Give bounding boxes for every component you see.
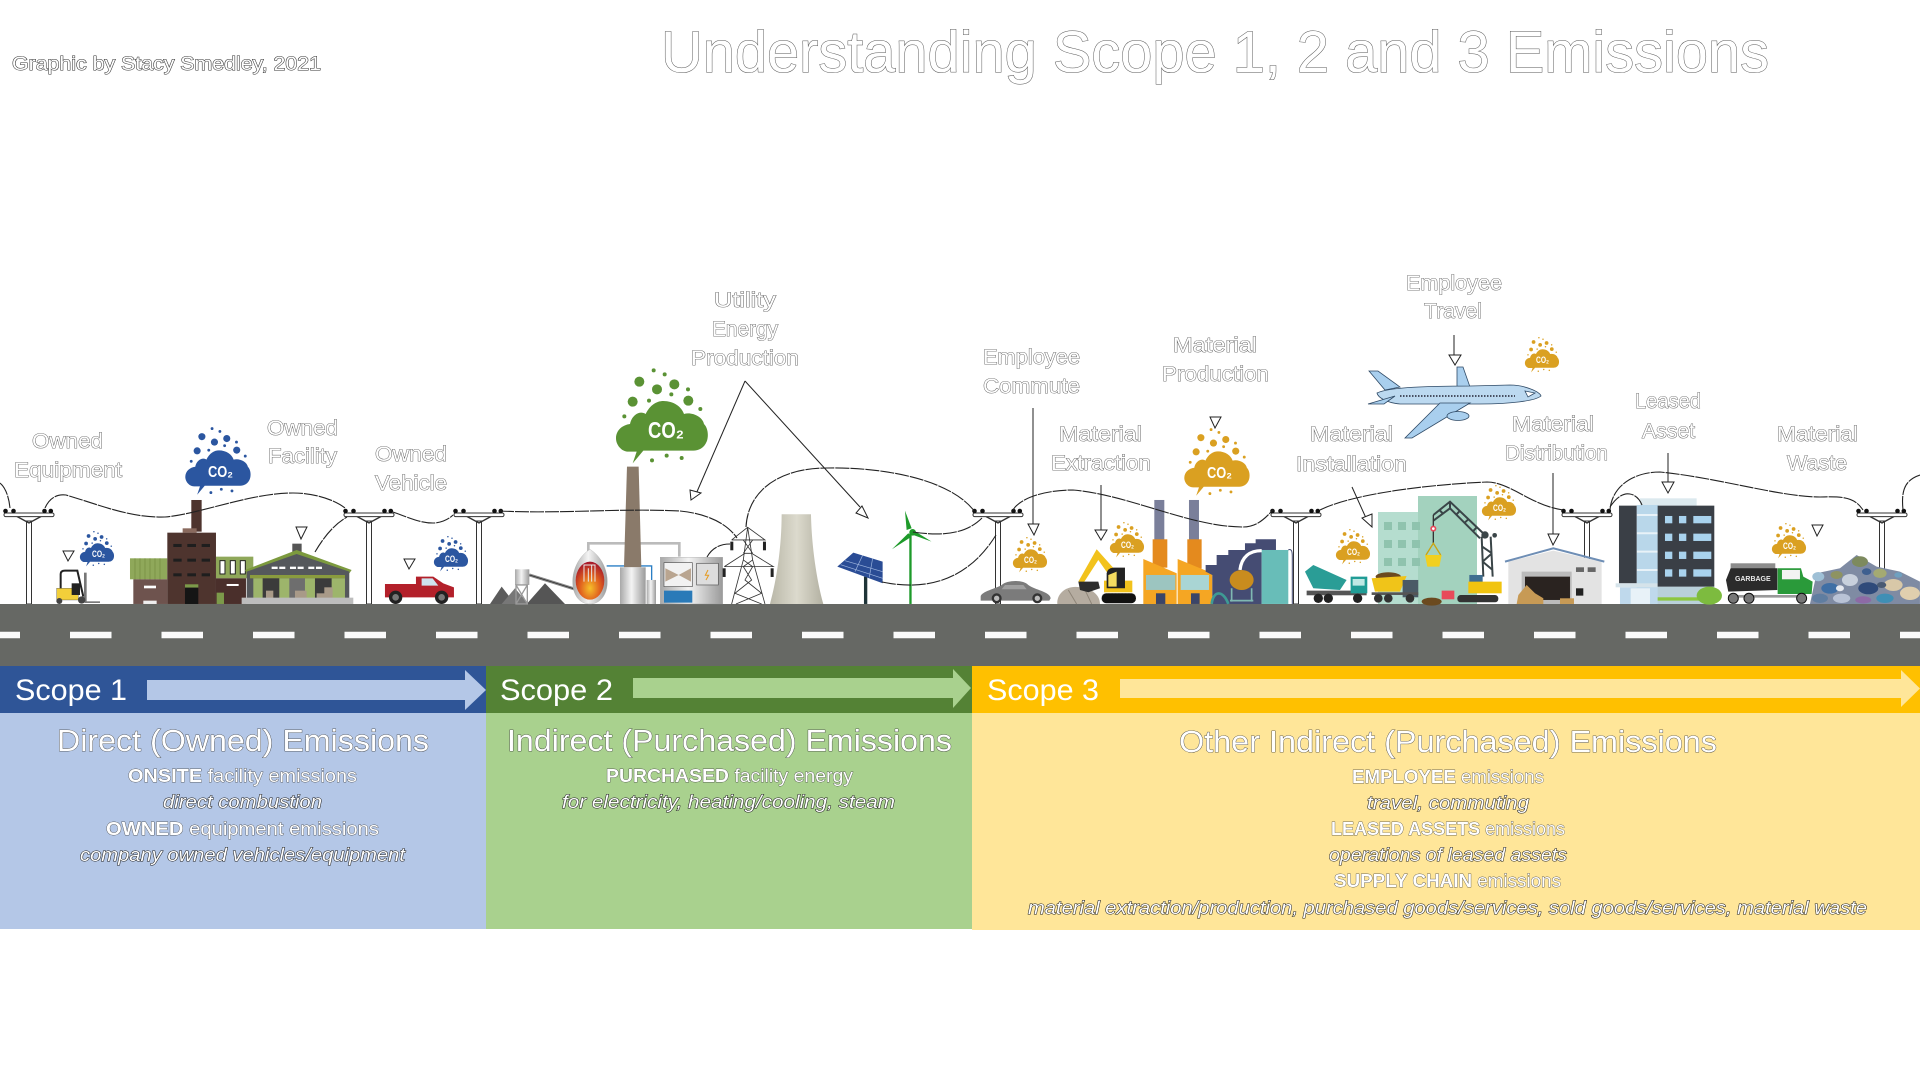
label: utility energy production: Utility — [714, 289, 777, 312]
utility poles — [3, 509, 1907, 604]
scope 3 title: Scope 3 — [987, 674, 1099, 707]
scope 2 heading: Indirect (Purchased) Emissions — [507, 723, 952, 758]
icon: small CO2 cloud, installation: CO₂ — [1347, 547, 1360, 557]
icon: crawler crane — [1422, 502, 1502, 606]
icon: large CO2 cloud, scope 3: CO₂ — [1207, 465, 1232, 482]
label: leased asset: Leased — [1635, 390, 1701, 413]
scope 1 text — [80, 766, 406, 865]
icon: teal buildings under construction — [1378, 496, 1477, 604]
title: Understanding Scope 1, 2 and 3 Emissions — [661, 20, 1769, 85]
icon: large CO2 cloud, scope 3 — [1184, 428, 1250, 496]
scope 1 heading: Direct (Owned) Emissions — [57, 723, 429, 758]
label: material production: Production — [1162, 363, 1269, 386]
label: utility energy production — [691, 289, 799, 370]
arrow: utility energy to renewables — [745, 381, 868, 518]
icon: large CO2 cloud, scope 1 — [185, 427, 251, 495]
icon: small CO2 cloud, commute — [1013, 537, 1047, 572]
icon: airplane — [1368, 367, 1541, 438]
label: material distribution: Distribution — [1505, 442, 1608, 465]
arrow: owned vehicle — [404, 559, 415, 569]
icon: solar panel — [837, 553, 883, 604]
scope 3 heading: Other Indirect (Purchased) Emissions — [1179, 724, 1717, 759]
scope 2 text: for electricity, heating/cooling, steam — [562, 792, 895, 812]
author credit: Graphic by Stacy Smedley, 2021 — [12, 54, 321, 75]
scope 3 text: EMPLOYEE emissions — [1352, 767, 1544, 787]
scope 2 text — [562, 766, 895, 812]
label: owned facility: Owned — [267, 417, 338, 440]
panel: scope 1 — [0, 666, 486, 929]
scope 2 title: Scope 2 — [500, 674, 613, 707]
scope 1 text: OWNED equipment emissions — [106, 819, 379, 839]
icon: garbage truck: GARBAGE — [1735, 574, 1771, 583]
icon: cooling tower — [770, 514, 823, 604]
icon: garbage truck — [1726, 563, 1813, 603]
icon: small CO2 cloud, travel: CO₂ — [1536, 355, 1549, 365]
icon: small CO2 cloud, vehicle: CO₂ — [445, 554, 458, 564]
label: owned vehicle — [375, 443, 447, 495]
scope 2 arrow — [633, 669, 971, 708]
icon: transmission tower — [723, 527, 774, 604]
label: owned vehicle: Owned — [375, 443, 447, 466]
icon: rocks and excavator — [1057, 549, 1136, 604]
label: owned equipment — [14, 430, 122, 482]
arrow: leased asset — [1662, 453, 1674, 493]
icon: small CO2 cloud, equipment: CO₂ — [92, 549, 105, 559]
arrow: employee travel — [1449, 335, 1461, 365]
scope 3 text: material extraction/production, purchased goods/services, sold goods/services, material waste — [1028, 898, 1867, 918]
icon: small CO2 cloud, waste — [1772, 523, 1806, 558]
icon: distribution warehouse — [1505, 548, 1604, 604]
label: material installation — [1296, 423, 1407, 476]
icon: small CO2 cloud, extraction — [1110, 522, 1144, 557]
scope 2 text: PURCHASED facility energy — [606, 766, 853, 786]
scope 3 text: travel, commuting — [1367, 793, 1529, 813]
scope 3 text: LEASED ASSETS emissions — [1331, 819, 1565, 839]
scope 1 text: ONSITE facility emissions — [128, 766, 357, 786]
label: employee travel — [1406, 272, 1502, 323]
arrow: owned facility — [296, 527, 307, 539]
label: material waste — [1777, 423, 1858, 475]
icon: small CO2 cloud, waste: CO₂ — [1783, 541, 1796, 551]
scope 1 arrow — [147, 670, 486, 710]
label: material installation: Installation — [1296, 453, 1407, 476]
label: utility energy production: Production — [691, 347, 799, 370]
icon: small CO2 cloud, equipment — [80, 531, 114, 566]
label: owned facility: Facility — [268, 445, 338, 468]
icon: dump truck — [1372, 572, 1418, 603]
label: material distribution: Material — [1512, 413, 1594, 436]
label: utility energy production: Energy — [712, 318, 778, 341]
icon: red pickup truck — [385, 577, 454, 604]
icon: boiler, stack and turbine hall — [573, 467, 723, 604]
panel: scope 3 — [972, 666, 1920, 930]
label: owned facility — [267, 417, 338, 468]
arrow: owned equipment — [63, 551, 74, 561]
icon: owned factory — [130, 500, 253, 604]
icon: large CO2 cloud, scope 1: CO₂ — [208, 464, 233, 481]
icon: small CO2 cloud, commute: CO₂ — [1024, 555, 1037, 565]
icon: orange material production plant — [1143, 500, 1292, 604]
icon: commuter car — [981, 581, 1051, 603]
scope 3 arrow — [1120, 670, 1920, 707]
label: material extraction: Material — [1059, 423, 1142, 446]
icon: leased office building — [1616, 498, 1722, 605]
arrow: material distribution — [1548, 473, 1559, 545]
icon: material waste pile — [1810, 555, 1920, 604]
icon: small CO2 cloud, vehicle — [434, 536, 468, 571]
icon: wind turbine — [892, 511, 932, 604]
label: employee travel: Employee — [1406, 272, 1502, 295]
scope 1 text: company owned vehicles/equipment — [80, 845, 406, 865]
label: owned vehicle: Vehicle — [375, 472, 447, 495]
scope 1 text: direct combustion — [163, 792, 322, 812]
scope 3 header bar — [972, 666, 1920, 713]
power lines — [0, 468, 1920, 585]
arrow: material installation — [1352, 487, 1372, 527]
label: leased asset — [1635, 390, 1701, 443]
arrows — [63, 335, 1823, 569]
label: owned equipment: Equipment — [14, 459, 122, 482]
label: employee commute: Employee — [983, 346, 1080, 369]
label: material installation: Material — [1310, 423, 1393, 446]
scope 1 title: Scope 1 — [15, 674, 127, 707]
label: material production — [1162, 334, 1269, 386]
label: owned equipment: Owned — [32, 430, 103, 453]
label: employee commute: Commute — [983, 375, 1080, 398]
label: material production: Material — [1173, 334, 1257, 357]
icon: large CO2 cloud, scope 2: CO₂ — [648, 417, 684, 443]
label: material waste: Material — [1777, 423, 1858, 446]
label: material distribution — [1505, 413, 1608, 465]
scope 3 text: SUPPLY CHAIN emissions — [1334, 871, 1561, 891]
icon: forklift — [56, 571, 100, 604]
label: leased asset: Asset — [1642, 420, 1695, 443]
icon: coal piles and conveyor — [490, 569, 580, 604]
icon: small CO2 cloud, extraction: CO₂ — [1121, 540, 1134, 550]
scope 3 text: operations of leased assets — [1329, 845, 1567, 865]
arrow: material production — [1210, 417, 1221, 428]
label: material extraction: Extraction — [1051, 452, 1151, 475]
icon: small CO2 cloud, travel — [1525, 337, 1559, 372]
scope 1 header bar — [0, 666, 486, 713]
scope 3 text — [1028, 767, 1867, 918]
icon: small CO2 cloud, installation — [1336, 529, 1370, 564]
arrow: employee commute — [1028, 408, 1039, 535]
icon: small CO2 cloud, crane: CO₂ — [1493, 503, 1506, 513]
arrow: material waste — [1812, 525, 1823, 536]
icon: cement mixer truck — [1305, 565, 1367, 603]
label: employee travel: Travel — [1424, 300, 1482, 323]
panel: scope 2 — [486, 666, 972, 929]
icon: small CO2 cloud, crane — [1482, 485, 1516, 520]
road — [0, 604, 1920, 666]
scope 2 header bar — [486, 666, 972, 713]
label: employee commute — [983, 346, 1080, 398]
icon: owned warehouse facility — [242, 544, 353, 604]
label: material waste: Waste — [1787, 452, 1847, 475]
icon: large CO2 cloud, scope 2 — [616, 368, 708, 463]
arrow: utility energy to plant — [690, 381, 745, 500]
arrow: material extraction — [1095, 485, 1107, 540]
label: material extraction — [1051, 423, 1151, 475]
